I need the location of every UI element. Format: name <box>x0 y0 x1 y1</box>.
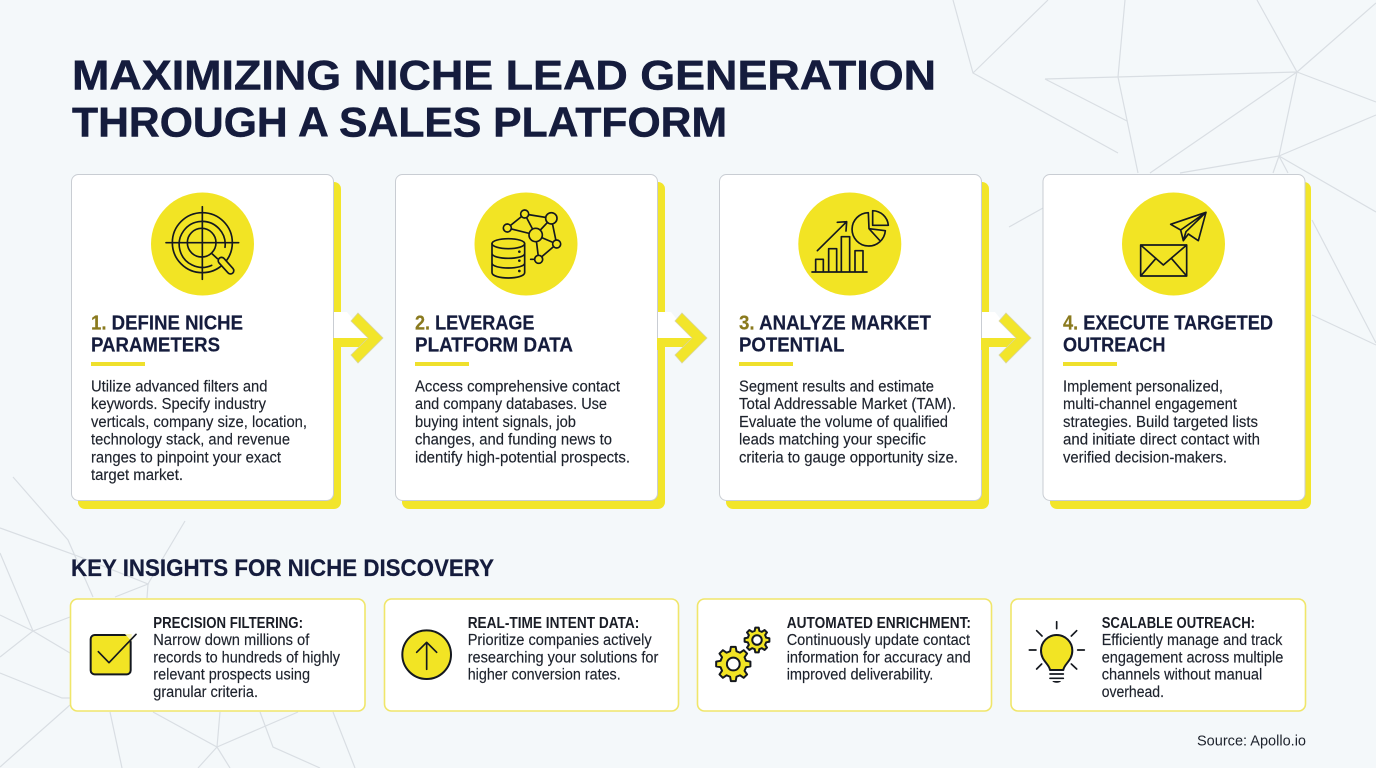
title <box>72 52 936 146</box>
icon: target with magnifier <box>166 207 239 279</box>
step description: ranges to pinpoint your exact <box>91 450 282 466</box>
panel: step 4 execute targeted outreach <box>1043 174 1311 509</box>
step description <box>415 378 630 466</box>
insight text: engagement across multiple <box>1102 649 1283 666</box>
panel: step 1 define niche parameters <box>72 174 341 509</box>
arrow: step 1 to step 2 <box>333 312 383 363</box>
insight text <box>468 615 658 684</box>
step heading: 2. LEVERAGE <box>415 312 534 334</box>
step description: strategies. Build targeted lists <box>1063 414 1258 431</box>
step heading <box>415 312 573 356</box>
step heading: PARAMETERS <box>91 334 220 356</box>
section heading: KEY INSIGHTS FOR NICHE DISCOVERY <box>71 555 494 582</box>
insight text: channels without manual <box>1102 667 1262 684</box>
insight text: AUTOMATED ENRICHMENT: <box>787 615 971 632</box>
panel: automated enrichment <box>698 599 992 711</box>
step description: and initiate direct contact with <box>1063 432 1260 449</box>
step description: and company databases. Use <box>415 396 607 413</box>
icon: checkbox <box>91 634 136 674</box>
insight text: SCALABLE OUTREACH: <box>1102 615 1255 632</box>
step heading <box>91 312 243 356</box>
insight text: Prioritize companies actively <box>468 632 652 649</box>
insight text: PRECISION FILTERING: <box>153 615 303 632</box>
insight text <box>1102 615 1283 701</box>
step description <box>1063 378 1260 466</box>
step description: technology stack, and revenue <box>91 432 290 449</box>
step description: target market. <box>91 467 183 484</box>
title: THROUGH A SALES PLATFORM <box>72 98 727 146</box>
icon: bar chart and pie <box>812 211 888 272</box>
panel: step 2 leverage platform data <box>396 174 665 509</box>
insight text: REAL-TIME INTENT DATA: <box>468 615 639 632</box>
insight text: Efficiently manage and track <box>1102 632 1283 649</box>
arrow: step 3 to step 4 <box>981 312 1031 363</box>
step heading: 1. DEFINE NICHE <box>91 312 243 334</box>
step heading: 4. EXECUTE TARGETED <box>1063 312 1273 334</box>
panel: scalable outreach <box>1011 599 1306 711</box>
insight text: overhead. <box>1102 684 1164 701</box>
step description: criteria to gauge opportunity size. <box>739 450 958 466</box>
insight text: relevant prospects using <box>153 667 310 684</box>
step heading <box>1063 312 1273 356</box>
insight text: records to hundreds of highly <box>153 649 340 666</box>
insight text: improved deliverability. <box>787 667 933 684</box>
step description: leads matching your specific <box>739 432 926 449</box>
step description <box>739 378 958 466</box>
step description: Utilize advanced filters and <box>91 378 268 396</box>
insight text <box>787 615 971 684</box>
step description: Implement personalized, <box>1063 378 1223 396</box>
panel: precision filtering <box>70 599 365 711</box>
step description: Segment results and estimate <box>739 378 934 396</box>
panel: step 3 analyze market potential <box>720 174 989 509</box>
step description: identify high-potential prospects. <box>415 450 630 466</box>
icon: up arrow in circle <box>402 630 451 679</box>
step heading: OUTREACH <box>1063 334 1166 356</box>
insight text: granular criteria. <box>153 684 258 701</box>
step description <box>91 378 307 484</box>
insight text: researching your solutions for <box>468 649 658 666</box>
step heading <box>739 312 931 356</box>
insight text: Continuously update contact <box>787 632 971 649</box>
step description: verticals, company size, location, <box>91 414 307 431</box>
step description: Total Addressable Market (TAM). <box>739 396 956 413</box>
insight text <box>153 615 340 701</box>
insight text: Narrow down millions of <box>153 632 310 649</box>
step description: buying intent signals, job <box>415 414 576 431</box>
step description: multi-channel engagement <box>1063 396 1238 413</box>
panel: real-time intent data <box>384 599 678 711</box>
icon: envelope and paper plane <box>1141 212 1206 276</box>
step heading: 3. ANALYZE MARKET <box>739 312 931 334</box>
step description: Evaluate the volume of qualified <box>739 414 948 431</box>
insight text: information for accuracy and <box>787 649 971 666</box>
icon: database and network <box>492 210 561 278</box>
step description: keywords. Specify industry <box>91 396 266 413</box>
arrow: step 2 to step 3 <box>657 312 707 363</box>
step description: verified decision-makers. <box>1063 450 1227 466</box>
source note: Source: Apollo.io <box>1197 732 1306 750</box>
insight text: higher conversion rates. <box>468 667 621 684</box>
title: MAXIMIZING NICHE LEAD GENERATION <box>72 52 936 98</box>
step description: changes, and funding news to <box>415 432 612 449</box>
step heading: PLATFORM DATA <box>415 334 573 356</box>
icon: light bulb <box>1029 622 1084 683</box>
icon: gears <box>716 628 769 681</box>
step heading: POTENTIAL <box>739 334 844 356</box>
step description: Access comprehensive contact <box>415 378 621 396</box>
